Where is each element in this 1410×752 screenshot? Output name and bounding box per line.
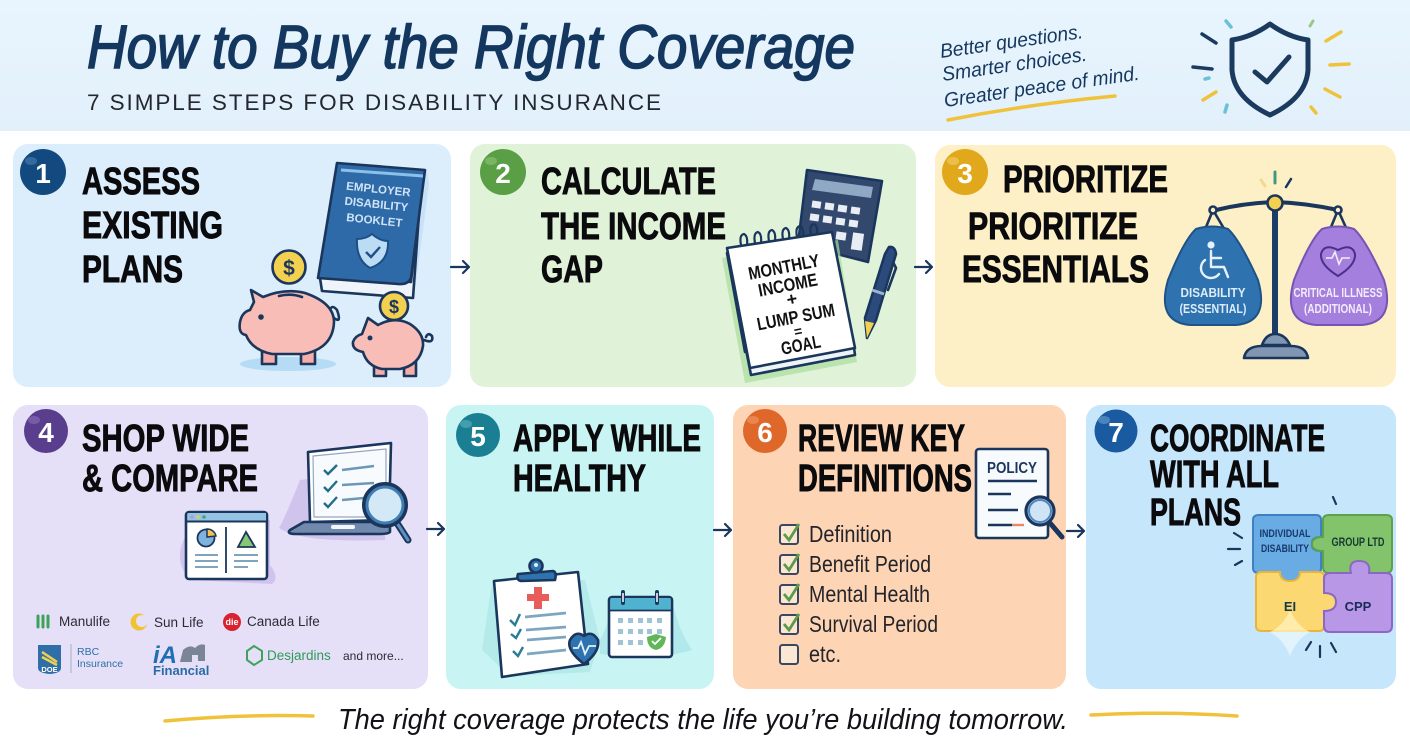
arrow: step 6 to 7 — [1067, 525, 1084, 537]
checklist — [780, 521, 938, 667]
header band — [0, 0, 1410, 131]
heading — [541, 161, 726, 291]
logo: Desjardins — [247, 646, 331, 665]
heading: COORDINATE — [1150, 418, 1325, 460]
heading: ASSESS — [82, 161, 200, 203]
icon: notepad with formula: + — [785, 288, 799, 310]
icon: puzzle of four plans — [1228, 497, 1392, 657]
puzzle piece: group LTD: GROUP LTD — [1332, 537, 1384, 549]
and more text: and more... — [343, 649, 404, 663]
arrow: step 1 to 2 — [451, 261, 469, 273]
icon: employer disability booklet: EMPLOYER — [346, 181, 412, 199]
heading: APPLY WHILE — [513, 418, 701, 460]
badge 1 — [20, 149, 66, 195]
panel: step 1 assess existing plans — [13, 144, 451, 387]
heading: GAP — [541, 249, 603, 291]
insurer logos — [38, 613, 404, 678]
logo: Manulife: Manulife — [59, 614, 110, 629]
heading — [82, 418, 258, 500]
badge 7: 7 — [1108, 417, 1124, 448]
heading: SHOP WIDE — [82, 418, 249, 460]
weight: critical illness additional: (ADDITIONAL) — [1304, 302, 1372, 316]
badge 6: 6 — [757, 417, 773, 448]
icon: pen — [865, 247, 896, 338]
icon: large piggy bank with coin: $ — [283, 257, 295, 280]
panel: step 5 apply while healthy — [446, 405, 714, 689]
heading: THE INCOME — [541, 206, 726, 248]
heading: & COMPARE — [82, 458, 258, 500]
icon: laptop with checklist and magnifier — [279, 443, 408, 540]
icon: notepad with formula: GOAL — [779, 331, 822, 359]
icon: clipboard with medical checklist — [482, 560, 600, 677]
puzzle piece: CPP — [1324, 561, 1392, 632]
weight: critical illness additional: CRITICAL ILLNESS — [1294, 286, 1382, 300]
title: How to Buy the Right Coverage — [87, 13, 855, 81]
badge 4: 4 — [38, 417, 54, 448]
logo: RBC Insurance — [38, 644, 123, 674]
heading — [513, 418, 701, 500]
heading: PLANS — [1150, 492, 1241, 534]
heading: DEFINITIONS — [798, 458, 972, 500]
heading: HEALTHY — [513, 458, 646, 500]
icon: calendar with check — [600, 592, 692, 657]
icon: employer disability booklet — [318, 163, 429, 298]
icon: employer disability booklet: DISABILITY — [344, 196, 409, 214]
checklist: Survival Period — [809, 611, 938, 637]
icon: employer disability booklet: BOOKLET — [346, 212, 403, 230]
icon: small piggy bank with coin — [353, 292, 432, 376]
arrow: step 4 to 5 — [427, 523, 444, 535]
panel: step 3 prioritize essentials — [935, 145, 1396, 387]
panel: step 6 review key definitions — [733, 405, 1066, 689]
heading: WITH ALL — [1150, 454, 1279, 496]
checklist: Benefit Period — [809, 551, 931, 577]
checklist: etc. — [809, 641, 841, 667]
icon: policy document with magnifier: POLICY — [987, 460, 1038, 477]
badge 4 — [24, 409, 68, 453]
weight: critical illness additional — [1291, 226, 1387, 325]
heading — [1150, 418, 1325, 534]
logo: Canada Life: Canada Life — [247, 614, 320, 629]
icon: shield with check and rays — [1193, 21, 1349, 115]
badge 2 — [480, 149, 526, 195]
icon: small piggy bank with coin: $ — [389, 297, 399, 317]
badge 2: 2 — [495, 158, 511, 189]
weight: disability essential: DISABILITY — [1180, 286, 1246, 300]
badge 5 — [456, 413, 500, 457]
panel: step 4 shop wide and compare — [13, 405, 428, 689]
arrow: step 5 to 6 — [714, 524, 731, 536]
badge 3: 3 — [957, 158, 973, 189]
logo: RBC Insurance: Insurance — [77, 658, 123, 670]
puzzle piece: EI: EI — [1284, 599, 1296, 614]
icon: calculator — [798, 170, 882, 262]
heading — [962, 159, 1168, 291]
heading: PRIORITIZE — [968, 206, 1138, 248]
footer tagline: The right coverage protects the life you’re building tomorrow. — [338, 704, 1068, 736]
logo: iA Financial: iA — [153, 642, 177, 669]
badge 3 — [942, 149, 988, 195]
icon: notepad with formula — [722, 224, 857, 383]
logo: iA Financial — [153, 642, 209, 678]
logo: Canada Life: die — [225, 617, 239, 627]
arrow: step 2 to 3 — [915, 261, 932, 273]
icon: notepad with formula: INCOME — [756, 270, 819, 301]
logo: Sun Life — [130, 614, 204, 630]
logo: Desjardins: Desjardins — [267, 648, 331, 663]
logo: Sun Life: Sun Life — [154, 615, 204, 630]
icon: large piggy bank with coin — [240, 250, 339, 371]
tagline: Greater peace of mind. — [943, 63, 1141, 112]
icon: heart with pulse — [569, 634, 598, 664]
tagline: Better questions. — [939, 21, 1084, 63]
heading: PRIORITIZE — [1003, 159, 1168, 201]
heading — [798, 418, 972, 500]
badge 6 — [743, 409, 787, 453]
heading: ESSENTIALS — [962, 249, 1149, 291]
logo: Canada Life — [223, 613, 320, 631]
puzzle piece: group LTD — [1312, 515, 1392, 573]
icon: notepad with formula: = — [793, 322, 804, 340]
badge 5: 5 — [470, 421, 486, 452]
heading: CALCULATE — [541, 161, 716, 203]
panel: step 7 coordinate with all plans — [1086, 405, 1396, 689]
tagline — [939, 21, 1141, 120]
icon: notepad with formula: MONTHLY — [747, 250, 821, 284]
subtitle: 7 SIMPLE STEPS FOR DISABILITY INSURANCE — [87, 90, 661, 115]
tagline: Smarter choices. — [941, 44, 1088, 86]
puzzle piece: individual disability: INDIVIDUAL — [1260, 528, 1311, 540]
heading: REVIEW KEY — [798, 418, 965, 460]
puzzle piece: CPP: CPP — [1345, 599, 1372, 614]
puzzle piece: individual disability — [1253, 515, 1321, 581]
checklist: Definition — [809, 521, 892, 547]
logo: RBC Insurance: RBC — [77, 646, 100, 658]
heading: PLANS — [82, 249, 183, 291]
weight: disability essential: (ESSENTIAL) — [1180, 302, 1246, 316]
icon: balance scale — [1165, 172, 1387, 358]
puzzle piece: individual disability: DISABILITY — [1261, 543, 1310, 555]
badge 7 — [1094, 410, 1138, 452]
logo: iA Financial: Financial — [153, 663, 209, 678]
heading: EXISTING — [82, 205, 223, 247]
badge 1: 1 — [35, 158, 51, 189]
heading — [82, 161, 223, 291]
icon: policy document with magnifier — [976, 449, 1062, 538]
puzzle piece: EI — [1256, 572, 1336, 656]
weight: disability essential — [1165, 226, 1261, 325]
checklist: Mental Health — [809, 581, 930, 607]
icon: notepad with formula: LUMP SUM — [755, 300, 837, 334]
panel: step 2 calculate the income gap — [470, 144, 916, 387]
logo: RBC Insurance: DOE — [41, 665, 58, 674]
icon: comparison window with charts — [180, 512, 276, 584]
